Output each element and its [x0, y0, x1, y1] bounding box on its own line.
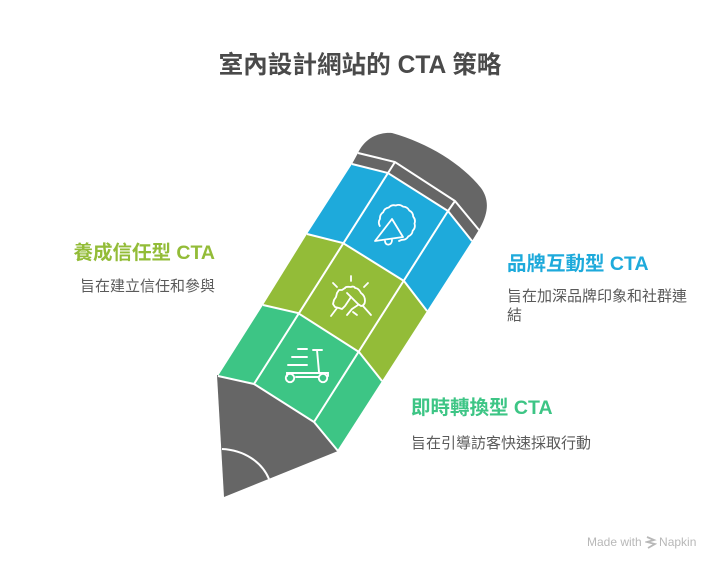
- icon: napkin logo: [645, 536, 657, 549]
- description: 旨在引導訪客快速採取行動: [411, 435, 591, 452]
- callout: 養成信任型 CTA: [73, 242, 215, 295]
- callout: 品牌互動型 CTA: [507, 253, 687, 324]
- blue pencil section: [307, 164, 472, 311]
- pencil eraser cap: [352, 133, 487, 241]
- green pencil section: [263, 234, 427, 381]
- heading: 養成信任型 CTA: [73, 242, 215, 264]
- description: 旨在建立信任和參與: [80, 278, 215, 295]
- teal pencil section: [218, 305, 382, 451]
- watermark: Made with Napkin: [587, 535, 696, 549]
- icon: megaphone with badge: [375, 205, 415, 245]
- icon: kick scooter: [286, 349, 328, 382]
- heading: 品牌互動型 CTA: [507, 253, 649, 275]
- title: 室內設計網站的 CTA 策略: [219, 52, 501, 79]
- section separator lines: [218, 164, 472, 451]
- description: [507, 288, 687, 324]
- heading: 即時轉換型 CTA: [411, 397, 553, 419]
- callout: 即時轉換型 CTA: [411, 397, 591, 452]
- pencil tip: [217, 375, 338, 497]
- description: 旨在加深品牌印象和社群連: [507, 288, 687, 305]
- icon: clasped hands: [331, 276, 371, 316]
- description: 結: [507, 307, 522, 324]
